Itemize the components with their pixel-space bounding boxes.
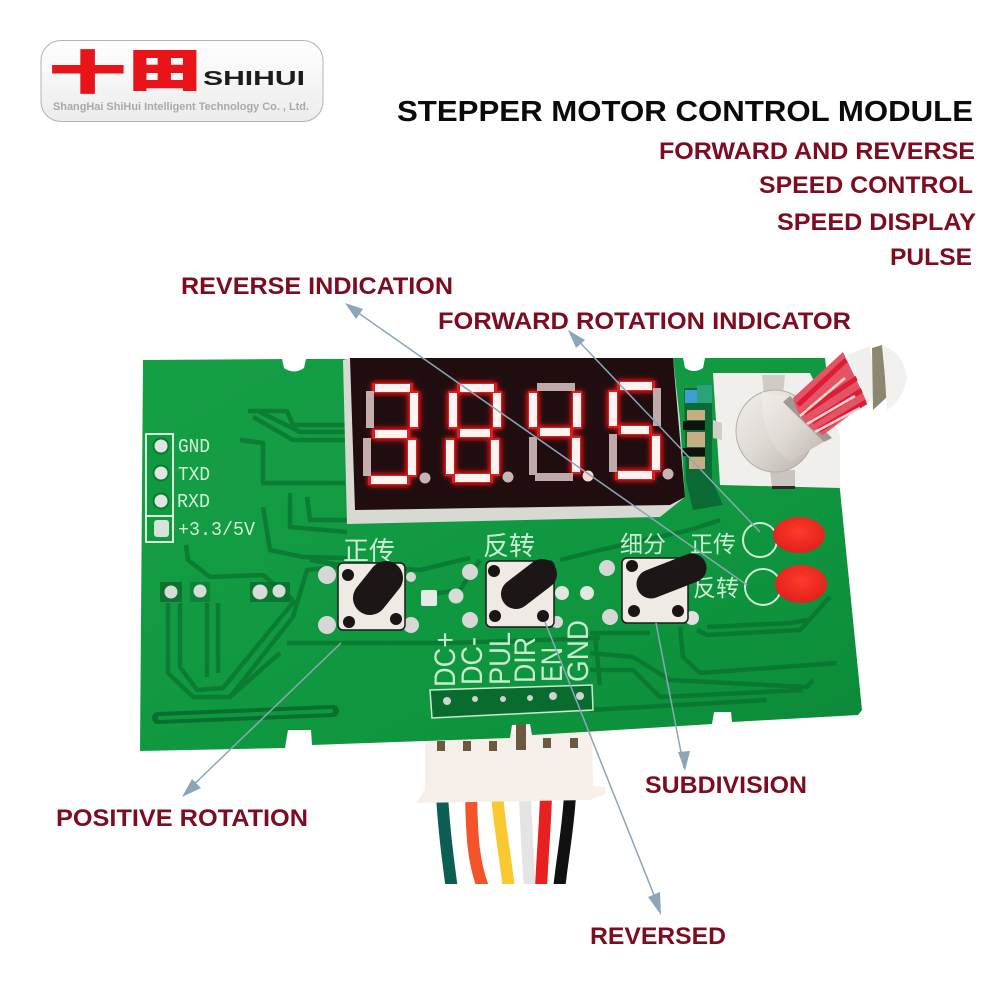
silkscreen labels: 反转 xyxy=(483,531,535,561)
callout: reverse indication: REVERSE INDICATION xyxy=(181,273,453,300)
connector header pins xyxy=(429,620,595,718)
logo xyxy=(41,36,323,122)
feature list xyxy=(659,138,976,271)
digit 4 xyxy=(613,386,657,475)
title: STEPPER MOTOR CONTROL MODULE xyxy=(397,96,973,128)
wires xyxy=(442,795,570,890)
pin labels: DIR xyxy=(509,637,542,683)
resistor strip xyxy=(683,385,723,510)
feature list: SPEED CONTROL xyxy=(759,172,973,199)
pin labels: EN xyxy=(536,647,569,682)
pin labels xyxy=(429,620,595,687)
LED outlines xyxy=(743,523,781,605)
callout: reversed: REVERSED xyxy=(590,923,726,950)
debug header GND TXD RXD +3.3/5V: +3.3/5V xyxy=(178,519,256,541)
callout: forward rotation indicator: FORWARD ROTATION INDICATOR xyxy=(438,308,851,335)
LED reverse xyxy=(775,565,827,603)
pin labels: PUL xyxy=(484,632,517,685)
long slot trace xyxy=(158,711,333,718)
digit 3 xyxy=(533,387,577,477)
digit 1 xyxy=(367,388,414,480)
debug header GND TXD RXD +3.3/5V: RXD xyxy=(177,491,210,513)
feature list: PULSE xyxy=(890,244,972,271)
debug header GND TXD RXD +3.3/5V: TXD xyxy=(178,464,210,486)
feature list: SPEED DISPLAY xyxy=(777,209,976,236)
logo tagline: ShangHai ShiHui Intelligent Technology Co. , Ltd. xyxy=(53,101,309,113)
rotary encoder knob xyxy=(713,345,907,489)
arrow: forward rotation indicator xyxy=(568,330,760,532)
callout: positive rotation: POSITIVE ROTATION xyxy=(56,805,308,832)
logo mark xyxy=(51,36,200,101)
pin labels: GND xyxy=(562,620,595,682)
white wire connector xyxy=(416,724,605,803)
debug header GND TXD RXD +3.3/5V xyxy=(146,434,256,542)
logo name: SHIHUI xyxy=(203,68,305,90)
silkscreen labels: 细分 xyxy=(620,531,666,557)
arrow: reverse indication xyxy=(345,303,747,585)
pin labels: DC+ xyxy=(429,632,462,687)
silkscreen labels: 正传 xyxy=(690,531,736,557)
button left xyxy=(318,563,419,634)
metal bushing xyxy=(736,390,814,472)
decimal points xyxy=(420,468,674,484)
logo mark: 田 xyxy=(130,36,200,99)
seven-segment display xyxy=(343,358,685,524)
circuit board xyxy=(140,345,907,751)
digit 2 xyxy=(450,388,497,478)
callout: subdivision: SUBDIVISION xyxy=(645,772,807,799)
ribbed shaft xyxy=(793,352,867,435)
arrow: reversed xyxy=(545,622,661,915)
pin labels: DC- xyxy=(456,637,489,685)
button right xyxy=(599,558,699,625)
arrow: subdivision xyxy=(656,623,690,771)
solder pads left xyxy=(160,582,594,606)
silkscreen labels xyxy=(343,531,739,601)
copper traces xyxy=(168,411,837,710)
arrow: positive rotation xyxy=(182,643,341,797)
LED forward xyxy=(773,517,825,553)
silkscreen labels: 正传 xyxy=(343,536,395,566)
digit glow xyxy=(368,386,656,480)
button middle xyxy=(462,561,563,628)
feature list: FORWARD AND REVERSE xyxy=(659,138,975,165)
logo mark: 十 xyxy=(51,38,124,101)
silkscreen labels: 反转 xyxy=(693,575,739,601)
shaft head xyxy=(847,346,877,403)
debug header GND TXD RXD +3.3/5V: GND xyxy=(178,436,210,458)
